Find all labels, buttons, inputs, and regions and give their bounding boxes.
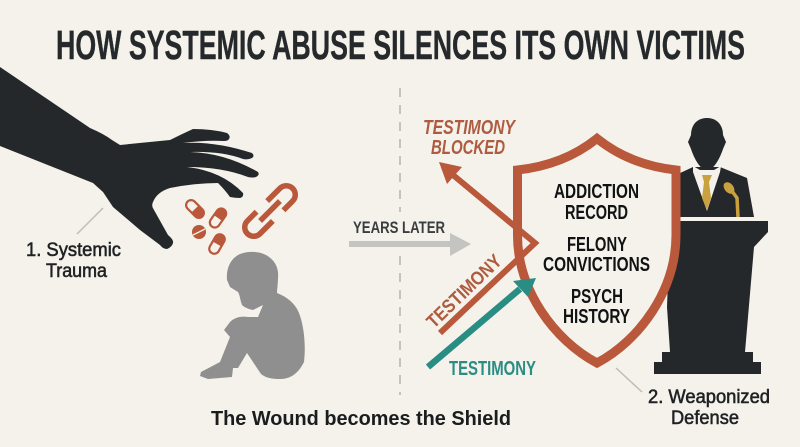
divider: dashed timeline <box>399 88 401 395</box>
shield text: addiction record: RECORD <box>565 201 628 224</box>
shield text: felony convictions <box>543 233 650 276</box>
label: years later: YEARS LATER <box>353 218 445 237</box>
label: testimony blocked: BLOCKED <box>431 137 505 159</box>
arrow: blocked testimony deflected <box>439 162 535 333</box>
leader line: weaponized defense <box>616 368 642 392</box>
leader line: systemic trauma <box>77 208 103 234</box>
podium speaker <box>654 118 768 374</box>
icon: huddled child <box>200 252 305 379</box>
shirt <box>693 166 721 211</box>
label: testimony rotated: TESTIMONY <box>423 251 507 333</box>
label: testimony blocked <box>423 117 516 159</box>
shield text: psych history <box>563 285 630 328</box>
arrow: teal testimony <box>428 278 536 367</box>
icon: microphone <box>721 180 738 217</box>
shield text: addiction record: ADDICTION <box>554 180 639 203</box>
icon: lectern <box>654 221 768 374</box>
shield text: psych history: HISTORY <box>563 305 630 328</box>
label: systemic trauma: 1. Systemic <box>26 240 121 261</box>
shield text: felony convictions: CONVICTIONS <box>543 253 650 276</box>
arrow: years later <box>349 233 471 256</box>
caption: The Wound becomes the Shield <box>211 407 511 430</box>
label: weaponized defense: Defense <box>671 408 739 429</box>
icon: reaching hand <box>0 67 259 249</box>
shield text: addiction record <box>554 180 639 224</box>
label: testimony teal: TESTIMONY <box>449 358 536 380</box>
shield text: felony convictions: FELONY <box>567 233 627 256</box>
shield <box>518 138 676 363</box>
label: weaponized defense <box>648 387 770 429</box>
label: systemic trauma: Trauma <box>46 261 107 282</box>
shield text: psych history: PSYCH <box>571 285 623 308</box>
label: testimony blocked: TESTIMONY <box>423 117 516 139</box>
icon: gold tie <box>702 175 712 210</box>
icon: speaker silhouette <box>678 118 754 217</box>
label: weaponized defense: 2. Weaponized <box>648 387 770 408</box>
icon: broken chain <box>241 182 299 240</box>
label: systemic trauma <box>26 240 121 282</box>
icon: pills <box>184 198 228 256</box>
